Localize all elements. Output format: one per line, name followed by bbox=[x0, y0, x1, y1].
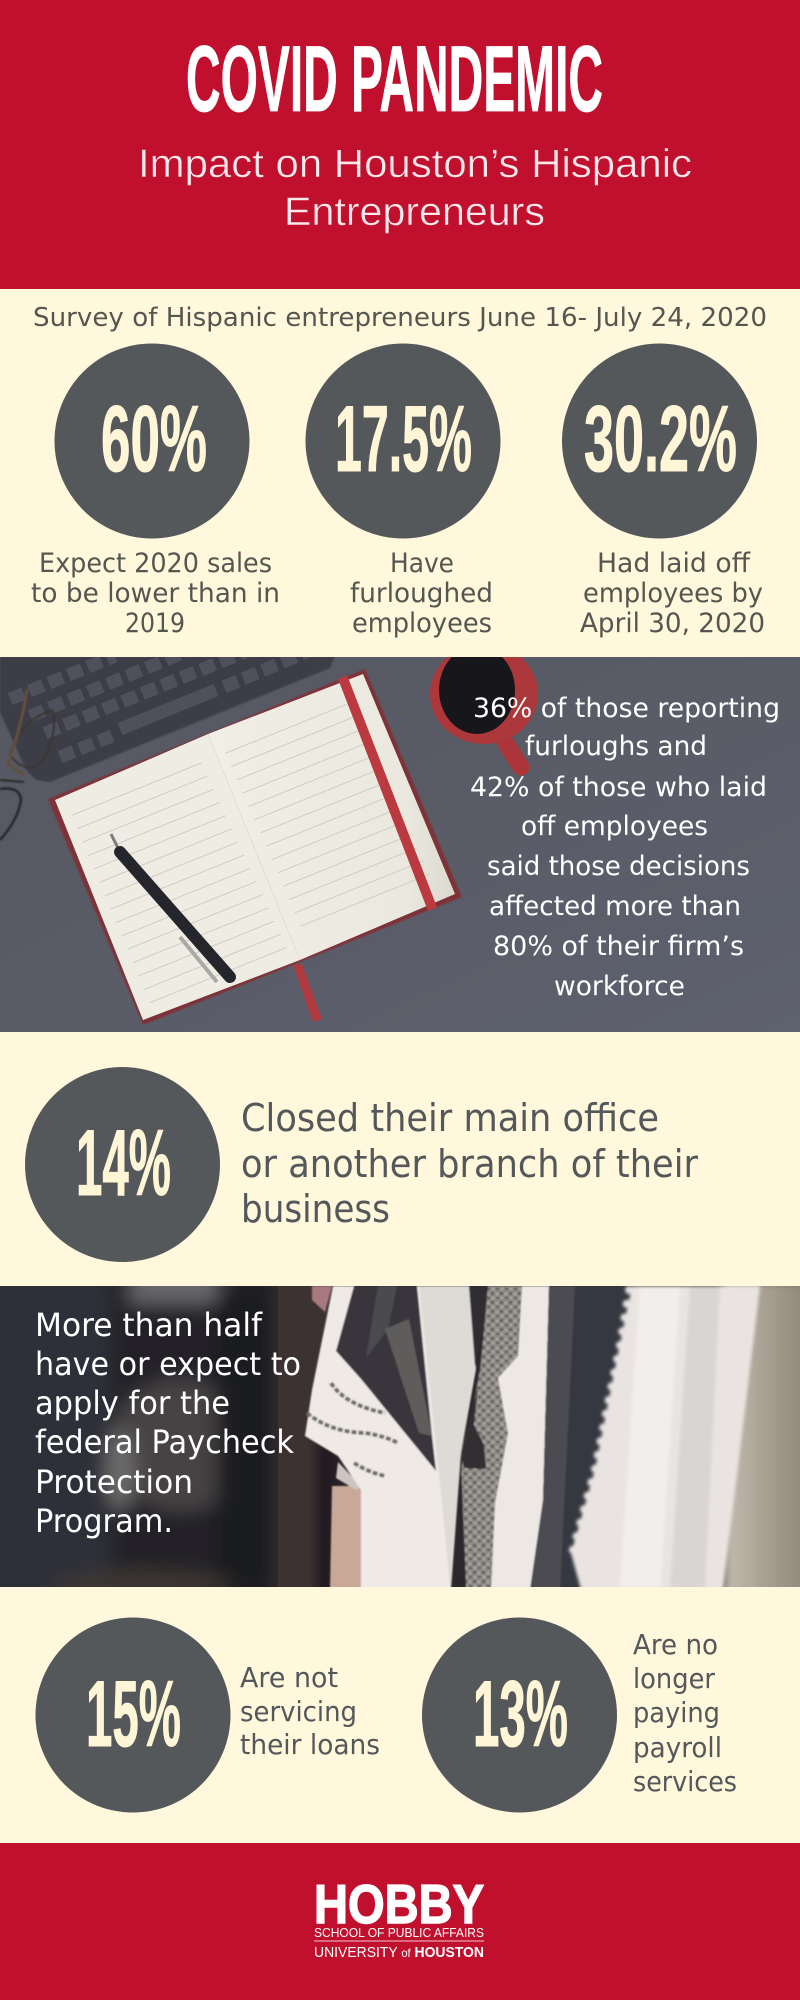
stat description bbox=[633, 1628, 737, 1798]
photo: large white garment bbox=[571, 1286, 760, 1590]
pen bbox=[111, 834, 230, 982]
logo: Hobby School: SCHOOL OF PUBLIC AFFAIRS bbox=[314, 1926, 484, 1940]
furlough text: 36% of those reporting bbox=[473, 693, 780, 724]
photo: keyboard bbox=[0, 657, 334, 782]
photo: coffee mug bbox=[430, 644, 538, 767]
photo: clothes bbox=[305, 1286, 632, 1590]
stat: 14 percent bbox=[25, 1067, 698, 1262]
stat: 30.2 percent bbox=[562, 344, 765, 639]
subtitle: Entrepreneurs bbox=[284, 190, 545, 234]
stat caption: Expect 2020 sales bbox=[39, 548, 272, 579]
furlough text: off employees bbox=[521, 811, 708, 842]
stat description: Are not bbox=[240, 1661, 338, 1694]
stat description: Are no bbox=[633, 1628, 718, 1661]
stat description: business bbox=[241, 1187, 390, 1231]
furlough text: workforce bbox=[554, 971, 685, 1002]
embroidery on sleeve bbox=[307, 1383, 398, 1476]
furlough text bbox=[470, 693, 780, 1002]
stat description: servicing bbox=[240, 1695, 357, 1728]
panel: footer bbox=[0, 1843, 800, 2000]
panel: notebook photo with furlough text bbox=[0, 642, 800, 1032]
logo: Hobby School bbox=[314, 1873, 484, 1961]
stat caption: Had laid off bbox=[597, 548, 751, 579]
photo: notebook bbox=[48, 669, 462, 1025]
PPP text: Protection bbox=[35, 1463, 193, 1501]
ribbon bookmark bbox=[293, 964, 322, 1022]
stat: 13 percent bbox=[422, 1618, 737, 1812]
furlough text: furloughs and bbox=[525, 731, 707, 762]
stat description: their loans bbox=[240, 1728, 380, 1761]
stat caption bbox=[350, 548, 493, 639]
furlough text: said those decisions bbox=[487, 851, 750, 882]
subtitle: Impact on Houston’s Hispanic bbox=[138, 142, 692, 186]
PPP text: federal Paycheck bbox=[35, 1423, 294, 1461]
furlough text: 42% of those who laid bbox=[470, 772, 767, 803]
photo: right-side blurred rack bbox=[270, 1280, 800, 1600]
stat number: 15% bbox=[86, 1661, 181, 1766]
stat: 15 percent bbox=[36, 1618, 380, 1812]
logo: Hobby School: HOBBY bbox=[314, 1873, 484, 1935]
stat caption: furloughed bbox=[350, 578, 493, 609]
panel: header bbox=[0, 0, 800, 289]
stat: 17.5 percent bbox=[306, 344, 500, 639]
furlough text: 80% of their firm’s bbox=[493, 931, 744, 962]
stat number: 60% bbox=[101, 386, 207, 491]
PPP text: have or expect to bbox=[35, 1345, 301, 1383]
stat caption: to be lower than in bbox=[31, 578, 280, 609]
subtitle bbox=[138, 142, 692, 234]
stat caption: employees bbox=[352, 608, 492, 639]
stat number: 13% bbox=[473, 1661, 568, 1766]
logo: Hobby School: UNIVERSITY of HOUSTON bbox=[314, 1944, 484, 1961]
stat description: paying bbox=[633, 1696, 720, 1729]
stat: 60 percent bbox=[31, 344, 280, 639]
photo: glasses bbox=[0, 689, 54, 840]
stat caption: April 30, 2020 bbox=[580, 608, 765, 639]
stat caption: 2019 bbox=[125, 608, 185, 639]
photo: blurred background bbox=[0, 1286, 231, 1587]
stat description: payroll bbox=[633, 1731, 722, 1764]
stat description: longer bbox=[633, 1662, 715, 1695]
furlough text: affected more than bbox=[489, 891, 741, 922]
stat number: 17.5% bbox=[335, 386, 472, 491]
stat description bbox=[240, 1661, 380, 1761]
panel: clothing rack photo with PPP text bbox=[0, 1286, 800, 1587]
stat description bbox=[241, 1096, 698, 1231]
stat caption: employees by bbox=[583, 578, 763, 609]
stat description: or another branch of their bbox=[241, 1142, 698, 1186]
stat caption: Have bbox=[390, 548, 454, 579]
PPP text: Program. bbox=[35, 1502, 173, 1540]
stat description: Closed their main office bbox=[241, 1096, 659, 1140]
stat number: 14% bbox=[76, 1110, 171, 1215]
photo: dark text overlay bbox=[0, 1286, 278, 1587]
survey heading: Survey of Hispanic entrepreneurs June 16- July 24, 2020 bbox=[33, 303, 767, 333]
stat description: services bbox=[633, 1765, 737, 1798]
PPP text: More than half bbox=[35, 1306, 263, 1344]
PPP text: apply for the bbox=[35, 1384, 230, 1422]
stat caption bbox=[31, 548, 280, 639]
stat caption bbox=[580, 548, 765, 639]
PPP text bbox=[35, 1306, 301, 1540]
